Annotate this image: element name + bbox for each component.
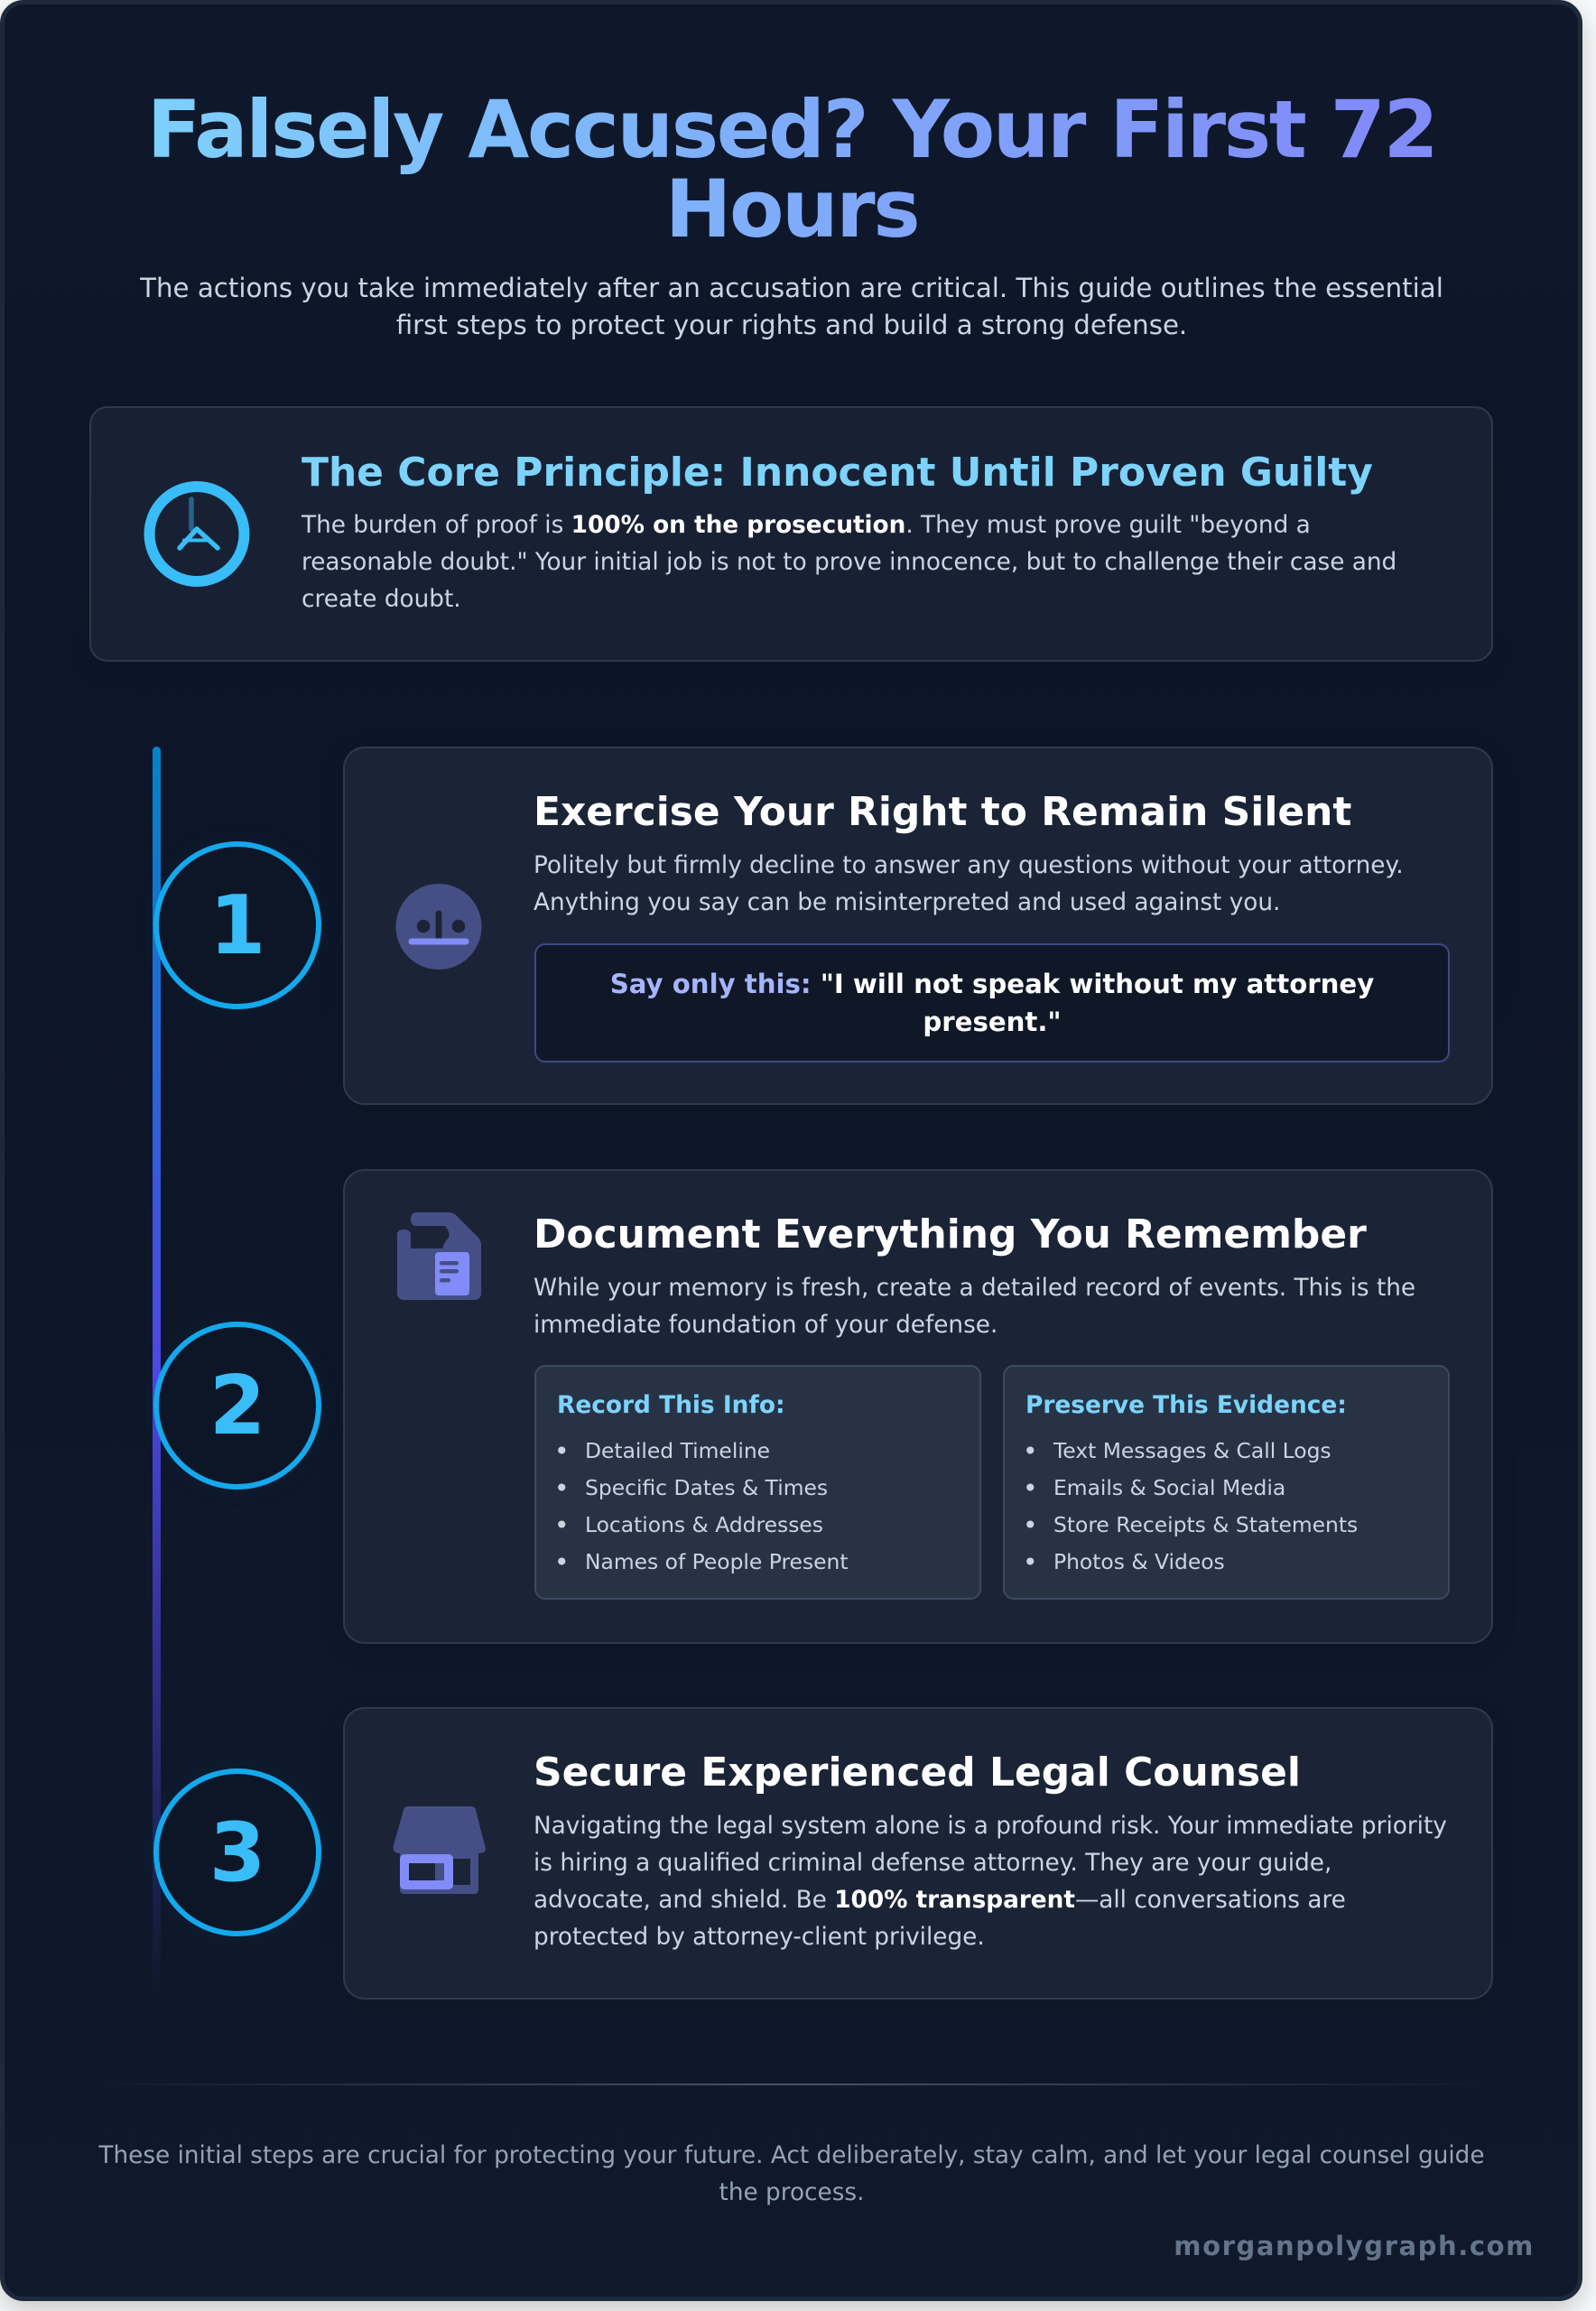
- subtitle: first steps to protect your rights and build a strong defense.: [396, 310, 1187, 340]
- record heading: Record This Info:: [557, 1391, 785, 1419]
- step 2 heading: Document Everything You Remember: [534, 1211, 1367, 1258]
- panel: step 1: [343, 747, 1493, 1105]
- preserve list: Emails & Social Media: [1053, 1475, 1285, 1500]
- sub-panel: record info: [534, 1365, 981, 1600]
- panel: step 2: [343, 1169, 1493, 1644]
- step 3 text: advocate, and shield. Be 100% transparent—all conversations are: [534, 1887, 1346, 1914]
- icon: silent face: [395, 884, 482, 970]
- quote box: present.": [923, 1007, 1062, 1037]
- title: Falsely Accused? Your First 72: [147, 83, 1436, 176]
- core text: [302, 512, 1396, 613]
- footer text: [98, 2142, 1485, 2206]
- step 3 heading: Secure Experienced Legal Counsel: [534, 1749, 1301, 1796]
- record list: Names of People Present: [585, 1549, 849, 1574]
- preserve list: Store Receipts & Statements: [1053, 1512, 1358, 1537]
- preserve list: Photos & Videos: [1053, 1549, 1225, 1574]
- footer text: These initial steps are crucial for protecting your future. Act deliberately, stay calm, and let your legal counsel guide: [98, 2142, 1485, 2169]
- panel: step 3: [343, 1707, 1493, 2000]
- step 2 text: [534, 1275, 1415, 1339]
- step 1 heading: Exercise Your Right to Remain Silent: [534, 789, 1351, 835]
- core text: create doubt.: [302, 586, 461, 613]
- preserve list: •: [1023, 1436, 1038, 1466]
- record list: •: [554, 1510, 570, 1540]
- quote box: Say only this: "I will not speak without my attorney: [610, 969, 1374, 999]
- step 3 number: [153, 1768, 321, 1936]
- sub-panel: preserve evidence: [1003, 1365, 1450, 1600]
- step 3 text: is hiring a qualified criminal defense attorney. They are your guide,: [534, 1850, 1332, 1877]
- subtitle: The actions you take immediately after an accusation are critical. This guide outlines the essential: [140, 273, 1443, 303]
- preserve list: •: [1023, 1473, 1038, 1503]
- record list: Specific Dates & Times: [585, 1475, 828, 1500]
- step 2 text: immediate foundation of your defense.: [534, 1312, 998, 1339]
- step 3 text: Navigating the legal system alone is a profound risk. Your immediate priority: [534, 1813, 1447, 1840]
- record list: •: [554, 1547, 570, 1577]
- step 3 number: 3: [209, 1805, 265, 1900]
- step 1 number: 1: [209, 878, 265, 973]
- record list: Locations & Addresses: [585, 1512, 823, 1537]
- preserve list: [1023, 1436, 1358, 1577]
- title: Hours: [665, 162, 918, 255]
- preserve heading: Preserve This Evidence:: [1025, 1391, 1347, 1419]
- step 2 text: While your memory is fresh, create a detailed record of events. This is the: [534, 1275, 1415, 1302]
- timeline line: [153, 747, 161, 1995]
- core text: reasonable doubt." Your initial job is not to prove innocence, but to challenge their case and: [302, 549, 1396, 576]
- title: [90, 90, 1493, 249]
- core text: The burden of proof is 100% on the prosecution. They must prove guilt "beyond a: [302, 512, 1311, 539]
- website credit: morganpolygraph.com: [1174, 2231, 1535, 2261]
- record list: •: [554, 1473, 570, 1503]
- step 2 number: [153, 1322, 321, 1490]
- record list: [554, 1436, 849, 1577]
- quote box: [534, 943, 1450, 1063]
- step 1 text: Politely but firmly decline to answer any questions without your attorney.: [534, 852, 1404, 879]
- record list: •: [554, 1436, 570, 1466]
- record list: Detailed Timeline: [585, 1438, 770, 1463]
- footer text: the process.: [719, 2179, 864, 2206]
- step 2 number: 2: [209, 1359, 265, 1453]
- preserve list: •: [1023, 1510, 1038, 1540]
- icon: folder with document: [397, 1212, 481, 1300]
- subtitle: [140, 273, 1443, 340]
- icon: clock: [144, 481, 249, 587]
- icon: storefront: [394, 1806, 486, 1894]
- step 1 text: [534, 852, 1404, 916]
- preserve list: •: [1023, 1547, 1038, 1577]
- preserve list: Text Messages & Call Logs: [1053, 1438, 1332, 1463]
- step 3 text: [534, 1813, 1447, 1951]
- core heading: The Core Principle: Innocent Until Proven Guilty: [302, 450, 1373, 496]
- step 1 number: [153, 841, 321, 1009]
- step 3 text: protected by attorney-client privilege.: [534, 1924, 985, 1951]
- panel: core principle: [89, 406, 1493, 662]
- step 1 text: Anything you say can be misinterpreted and used against you.: [534, 889, 1280, 916]
